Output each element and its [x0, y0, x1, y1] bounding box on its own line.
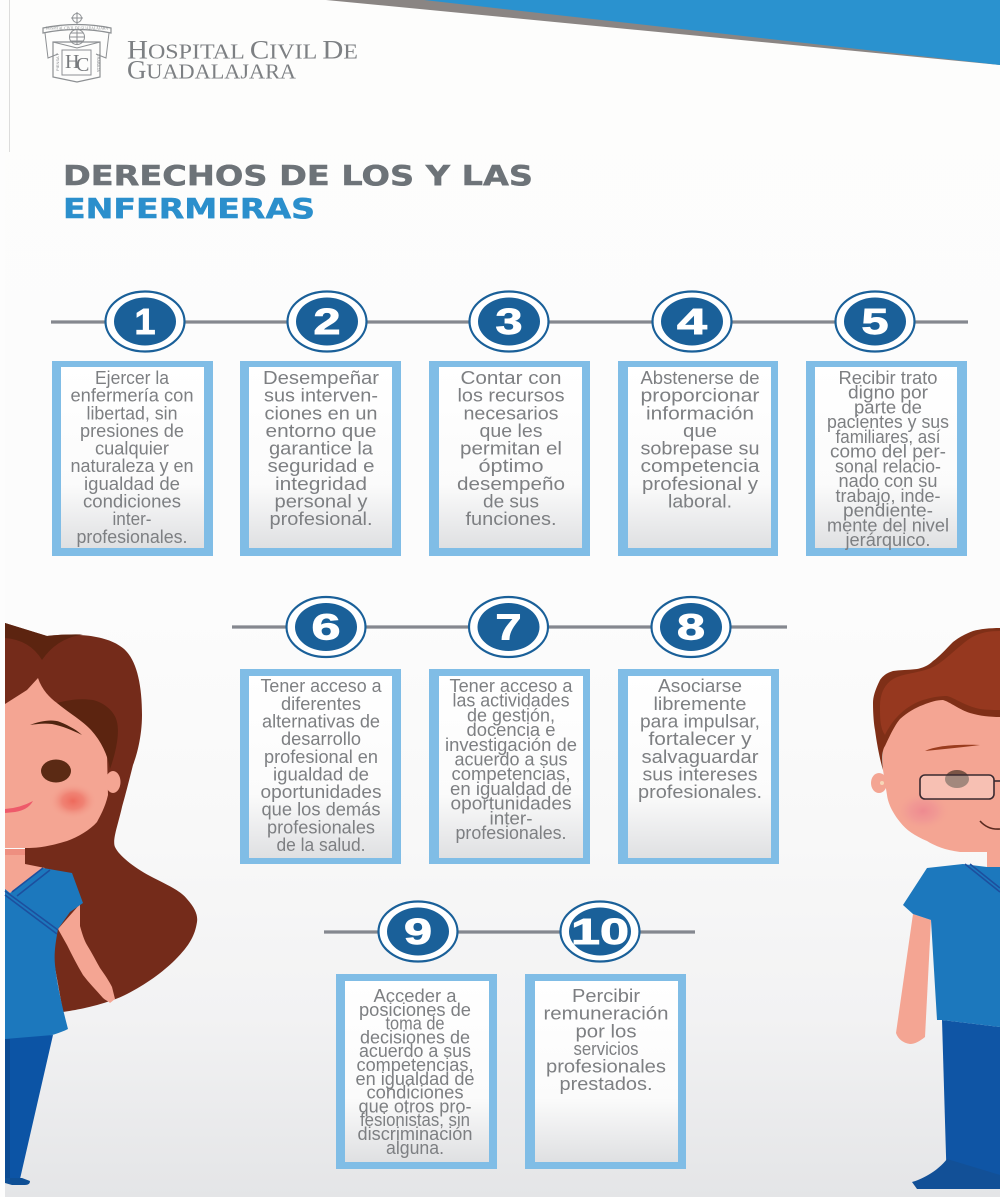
icon: hospital crest logo: TRABAJA — [96, 54, 101, 72]
card 5: mente del nivel — [827, 515, 949, 535]
badge 10: 10 — [571, 911, 629, 952]
card 6: desarrollo — [281, 729, 361, 749]
card 4: Abstenerse de — [640, 368, 760, 388]
card 10: remuneración — [544, 1004, 668, 1024]
card 2: seguridad e — [268, 456, 374, 476]
badge 2 — [288, 292, 366, 352]
woman face — [5, 678, 108, 848]
card 1: Ejercer la — [95, 368, 170, 388]
card 7: las actividades — [452, 691, 570, 711]
card 2: entorno que — [266, 421, 376, 441]
woman eye — [41, 760, 71, 782]
card 9: en igualdad de — [356, 1069, 474, 1089]
card 10: profesionales — [546, 1057, 666, 1077]
badge 5 — [836, 292, 914, 352]
card 8: sus intereses — [642, 764, 758, 784]
card 7: docencia e — [466, 720, 556, 740]
card 6: diferentes — [281, 694, 361, 714]
woman shirt — [5, 868, 83, 1039]
card 9: posiciones de — [359, 1000, 471, 1020]
badge 10 — [560, 902, 640, 962]
card 1: igualdad de — [84, 474, 180, 494]
card 5: sonal relacio- — [835, 456, 941, 476]
card 6: que los demás — [262, 800, 380, 820]
card 5: parte de — [854, 398, 922, 418]
card 1: libertad, sin — [86, 403, 178, 423]
card 6: igualdad de — [273, 764, 369, 784]
man shoe — [912, 1159, 1000, 1189]
card 9: toma de — [386, 1014, 444, 1034]
card 8: salvaguardar — [642, 747, 759, 767]
badge 2: 2 — [314, 301, 340, 342]
man neck — [987, 850, 1000, 870]
woman hair — [5, 623, 197, 1012]
card 7: de gestión, — [467, 705, 555, 725]
card 9: competencias, — [356, 1055, 474, 1075]
card 4 — [618, 361, 778, 556]
card 3 — [429, 361, 590, 556]
card 5: Recibir trato — [838, 368, 938, 388]
icon: hospital crest logo: HOSPITAL CIVIL DE GUADALAJARA — [46, 26, 109, 30]
card 3: Contar con — [460, 368, 562, 388]
icon: hospital crest logo: PIENSA Y — [55, 53, 60, 71]
card 2: profesional. — [270, 509, 372, 529]
man blush — [895, 791, 951, 831]
card 3: permitan el — [460, 439, 562, 459]
card 9: fesionistas, sin — [360, 1110, 470, 1130]
card 2: personal y — [274, 492, 368, 512]
card 10: prestados. — [560, 1074, 652, 1094]
card 5: trabajo, inde- — [836, 486, 940, 506]
man collar — [965, 864, 1000, 892]
card 2: sus interven- — [264, 386, 378, 406]
badge 3: 3 — [496, 301, 522, 342]
logo wordmark: HOSPITAL CIVIL DE — [127, 36, 358, 64]
card 6: de la salud. — [276, 835, 366, 855]
woman collar — [5, 868, 58, 934]
badge 4: 4 — [677, 301, 707, 342]
man eyebrow — [925, 745, 980, 751]
card 4: información — [646, 403, 754, 423]
badge 1 — [106, 292, 184, 352]
card 2: Desempeñar — [263, 368, 379, 388]
card 4: profesional y — [642, 474, 758, 494]
card 1: condiciones — [83, 492, 181, 512]
woman dark hair shading — [57, 699, 118, 769]
card 9: condiciones — [366, 1083, 464, 1103]
card 7: en igualdad de — [450, 779, 572, 799]
card 3: óptimo — [478, 456, 544, 476]
man shirt — [903, 864, 1000, 1027]
card 8: profesionales. — [638, 782, 762, 802]
card 9: alguna. — [386, 1138, 444, 1158]
top banner — [326, 0, 1000, 65]
card 1: enfermería con — [70, 386, 194, 406]
woman top hair wedge — [5, 623, 83, 660]
badge 7: 7 — [496, 606, 522, 648]
title: ENFERMERAS — [63, 193, 315, 225]
card 8 — [618, 669, 779, 864]
man pants — [942, 1020, 1000, 1189]
card 1: presiones de — [80, 421, 184, 441]
card 5: jerárquico. — [844, 530, 930, 550]
card 1: naturaleza y en — [70, 456, 194, 476]
card 5: nado con su — [838, 471, 938, 491]
woman ear — [106, 771, 120, 793]
card 2 — [240, 361, 401, 556]
card 9: acuerdo a sus — [359, 1041, 471, 1061]
card 5 — [806, 361, 967, 556]
card 3: desempeño — [457, 474, 565, 494]
card 2: integridad — [275, 474, 367, 494]
card 5: pacientes y sus — [827, 412, 949, 432]
woman mouth — [5, 801, 33, 813]
card 7: investigación de — [445, 735, 577, 755]
card 7 — [429, 669, 590, 864]
man hair — [873, 628, 1000, 770]
woman neck — [5, 849, 45, 893]
man face — [883, 696, 1000, 852]
badge 8: 8 — [677, 606, 705, 648]
card 4: proporcionar — [640, 386, 760, 406]
card 2: garantice la — [269, 439, 374, 459]
card 1: profesionales. — [76, 527, 188, 547]
card 8: para impulsar, — [640, 712, 760, 732]
badge 9: 9 — [404, 911, 432, 952]
card 8: Asociarse — [658, 676, 742, 696]
badge 9 — [378, 902, 458, 962]
card 6: oportunidades — [260, 782, 382, 802]
card 4: que — [683, 421, 717, 441]
man arm — [896, 914, 931, 1044]
illustration: nurse man — [871, 628, 1000, 1189]
card 4: sobrepase su — [640, 439, 760, 459]
card 4: competencia — [640, 456, 761, 476]
woman eyebrow — [30, 721, 82, 735]
icon: hospital crest logo: H — [65, 51, 79, 73]
card 1: cualquier — [95, 439, 169, 459]
card 7: competencias, — [452, 764, 570, 784]
card 3: que les — [480, 421, 542, 441]
badge 1: 1 — [134, 301, 156, 342]
man eye — [945, 770, 969, 788]
card 10: Percibir — [572, 986, 640, 1006]
card 6 — [240, 669, 401, 864]
title — [63, 160, 533, 225]
woman shoe — [5, 1178, 30, 1185]
card 5: familiares, así — [836, 427, 940, 447]
card 2: ciones en un — [264, 403, 378, 423]
logo wordmark: GUADALAJARA — [127, 56, 296, 84]
icon: hospital crest logo — [43, 12, 111, 82]
badge 3 — [470, 292, 548, 352]
man mouth — [980, 821, 1000, 829]
card 4: laboral. — [668, 492, 732, 512]
woman blush — [49, 783, 97, 819]
card 8: fortalecer y — [648, 729, 752, 749]
card 9: que otros pro- — [358, 1096, 472, 1116]
card 7: Tener acceso a — [450, 676, 573, 696]
card 1: inter- — [112, 509, 152, 529]
man glasses — [920, 775, 994, 799]
card 7: profesionales. — [456, 823, 566, 843]
card 6: profesional en — [264, 747, 378, 767]
woman pants — [5, 1035, 53, 1179]
badge 6 — [286, 597, 366, 657]
woman arm — [58, 904, 115, 1003]
card 7: oportunidades — [450, 794, 572, 814]
title: DERECHOS DE LOS Y LAS — [63, 160, 533, 192]
card 6: Tener acceso a — [260, 676, 382, 696]
card 10 — [525, 974, 686, 1169]
card 9: decisiones de — [360, 1027, 470, 1047]
card 10: servicios — [574, 1039, 638, 1059]
card 1 — [52, 361, 213, 556]
man ear — [871, 773, 887, 793]
card 10: por los — [576, 1021, 636, 1041]
card 9: discriminación — [358, 1124, 472, 1144]
card 6: profesionales — [267, 817, 375, 837]
card 9: Acceder a — [374, 986, 458, 1006]
card 3: los recursos — [458, 386, 564, 406]
icon: hospital crest logo: C — [76, 54, 89, 76]
card 5: como del per- — [830, 442, 946, 462]
logo wordmark — [127, 36, 358, 84]
card 5: pendiente- — [843, 501, 933, 521]
badge 7 — [469, 597, 548, 657]
card 9 — [336, 974, 497, 1169]
card 7: acuerdo a sus — [454, 750, 568, 770]
card 3: de sus — [483, 492, 539, 512]
card 8: libremente — [654, 694, 746, 714]
illustration: nurse woman — [5, 623, 197, 1185]
badge 4 — [652, 292, 732, 352]
card 5: digno por — [848, 383, 928, 403]
card 7: inter- — [490, 808, 532, 828]
badge 6: 6 — [312, 606, 340, 648]
badge 5: 5 — [862, 301, 888, 342]
badge 8 — [652, 597, 730, 657]
card 3: necesarios — [464, 403, 558, 423]
card 3: funciones. — [466, 509, 556, 529]
card 6: alternativas de — [262, 712, 380, 732]
